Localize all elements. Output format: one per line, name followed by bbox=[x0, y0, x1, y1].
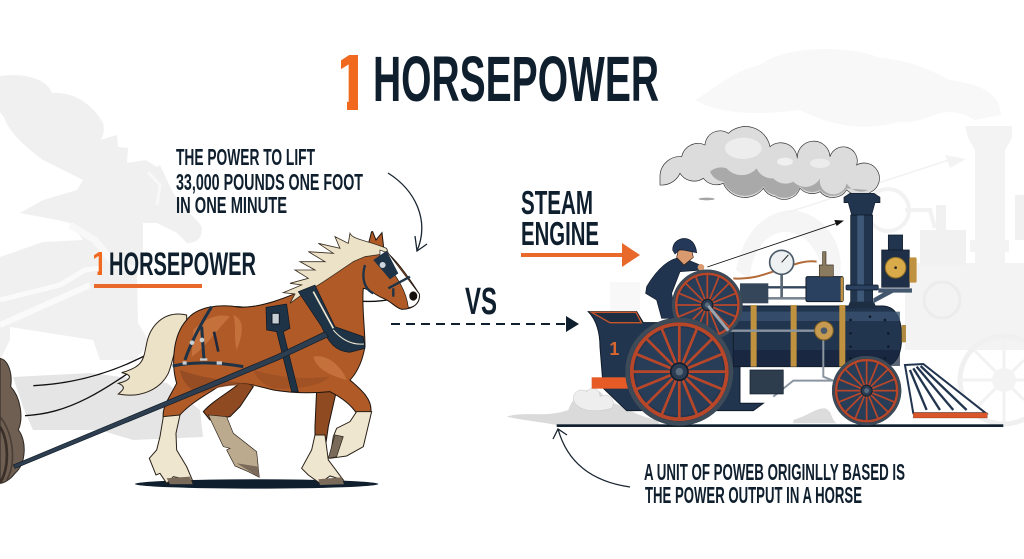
muscle highlights bbox=[192, 315, 347, 380]
cylinder bbox=[806, 252, 843, 340]
ground shadow bbox=[135, 479, 378, 489]
thin pointer arrow bbox=[707, 220, 844, 267]
collar bbox=[298, 285, 365, 352]
title bbox=[341, 55, 658, 110]
ghost horse silhouette bbox=[0, 75, 202, 360]
tail bbox=[118, 314, 187, 395]
reins bbox=[25, 292, 398, 416]
steam engine: 1 bbox=[609, 338, 619, 359]
machinery under the flywheel bbox=[740, 283, 783, 394]
lamp bbox=[873, 235, 917, 303]
label: steam engine: STEAM bbox=[521, 184, 593, 221]
label: steam engine bbox=[521, 184, 599, 252]
chimney bbox=[844, 193, 880, 308]
engineer bbox=[646, 239, 704, 318]
flywheel bbox=[672, 270, 743, 340]
cowcatcher bbox=[905, 364, 987, 418]
vs label: VS bbox=[465, 281, 497, 323]
saddle strap bbox=[266, 304, 298, 392]
text: definition of horsepower bbox=[176, 144, 363, 218]
bridle bbox=[363, 265, 410, 297]
ghost ground shadow bbox=[13, 373, 203, 440]
far front leg bbox=[315, 390, 337, 450]
label: steam engine: ENGINE bbox=[521, 215, 599, 252]
mane bbox=[283, 233, 388, 303]
label: 1 horsepower: HORSEPOWER bbox=[109, 246, 256, 282]
label: 1 horsepower bbox=[94, 252, 256, 288]
connecting rod bbox=[708, 306, 728, 331]
face blaze bbox=[380, 250, 419, 307]
smoke from chimney bbox=[660, 127, 879, 200]
text: definition of horsepower: THE POWER TO LIFT bbox=[176, 144, 315, 170]
title: HORSEPOWER bbox=[373, 43, 659, 115]
ghost steam engine bbox=[610, 126, 1024, 424]
label: 1 horsepower: 1 bbox=[91, 245, 109, 282]
dashed comparison arrow bbox=[391, 316, 579, 332]
cream feathered legs bbox=[149, 415, 193, 483]
title: 1 bbox=[330, 38, 374, 127]
horse bbox=[13, 232, 419, 489]
body bbox=[163, 232, 419, 418]
far hind leg bbox=[203, 380, 253, 420]
text: definition of horsepower: 33,000 POUNDS ONE FOOT bbox=[176, 169, 363, 195]
large rear wheel bbox=[625, 318, 733, 426]
curved arrow to engine bbox=[553, 429, 630, 487]
rear harness bbox=[173, 307, 243, 367]
front wheel bbox=[832, 356, 901, 425]
boiler bbox=[733, 305, 906, 367]
steam engine bbox=[507, 193, 1003, 427]
load: wagon bales bbox=[0, 358, 24, 483]
trace pole bbox=[13, 332, 328, 468]
text: unit of power note: THE POWER OUTPUT IN A HORSE bbox=[645, 482, 862, 508]
cab bbox=[588, 312, 763, 411]
text: definition of horsepower: IN ONE MINUTE bbox=[176, 192, 287, 218]
curved arrow to horse bbox=[388, 173, 427, 251]
text: unit of power note bbox=[644, 459, 905, 508]
ground line bbox=[557, 424, 1003, 427]
pressure gauge bbox=[770, 250, 794, 297]
ground smoke bbox=[507, 389, 660, 425]
orange arrow bbox=[521, 243, 640, 267]
pipes bbox=[720, 261, 835, 397]
ghost smoke cloud bbox=[695, 49, 1001, 127]
